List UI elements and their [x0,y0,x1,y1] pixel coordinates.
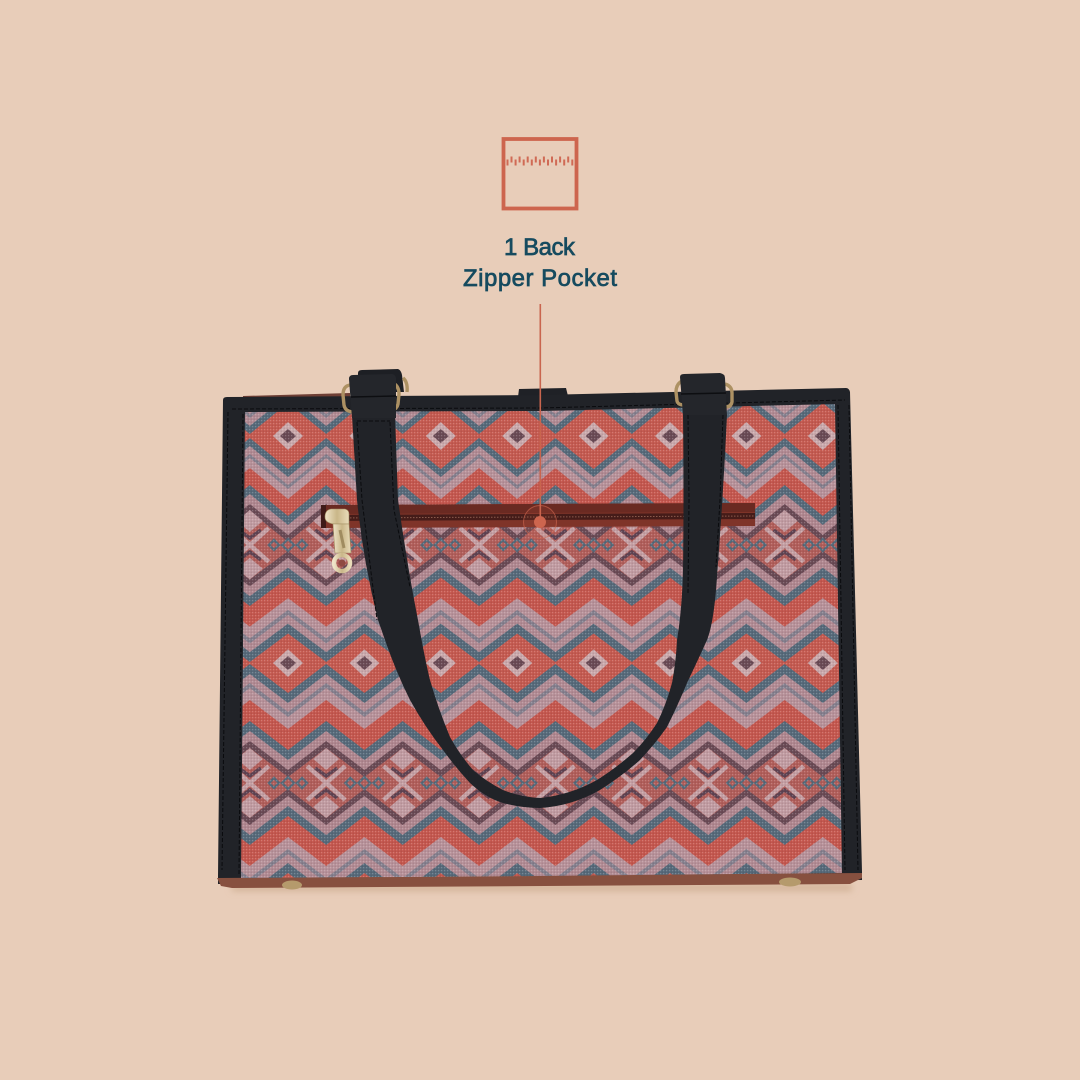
brass feet [282,878,801,890]
icon: back pocket with stitched zipper [504,139,576,208]
bag back trim and top tab [243,388,568,399]
strap stitching [357,413,723,620]
heading: 1 Back Zipper Pocket: 1 Back [504,234,576,261]
bag leather body [218,388,862,884]
shoulder straps [352,415,727,808]
brown base trim [217,873,862,888]
left strap back loop [358,369,404,392]
leather stitching [222,400,858,875]
right strap front loop [680,373,727,415]
heading: 1 Back Zipper Pocket [463,234,617,292]
back zipper pocket [321,503,755,528]
brass buckles [343,378,732,412]
zipper pull [325,509,351,571]
heading: 1 Back Zipper Pocket: Zipper Pocket [463,265,617,292]
left strap front loop [349,374,396,418]
bag shadow [232,884,852,891]
woven chevron fabric panel [235,400,847,883]
strap loop seams [351,393,726,397]
infographic canvas [217,137,862,894]
illustration: tote bag [217,369,862,890]
callout: leader line and hotspot [524,304,556,538]
